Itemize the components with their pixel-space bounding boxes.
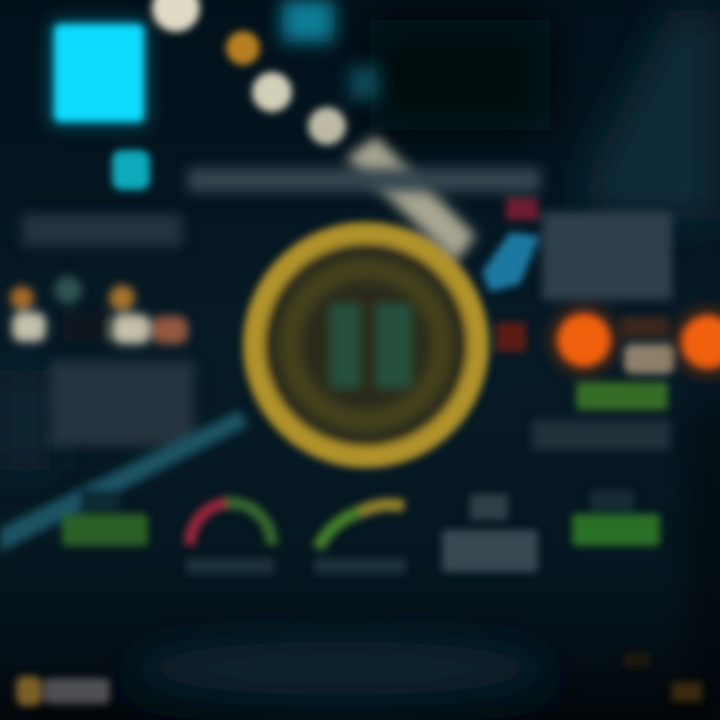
icon: green bar one — [62, 490, 148, 546]
mark: bottom right — [624, 652, 702, 702]
panel: left text block — [22, 214, 182, 246]
bar: right green — [576, 382, 668, 410]
gauge: red green — [190, 503, 272, 545]
logo: bottom left — [16, 676, 110, 706]
heading bar — [188, 168, 540, 192]
text: gauge two caption — [314, 558, 406, 574]
central gold ring — [254, 233, 478, 457]
icon: small cyan square — [112, 150, 150, 190]
panel: right text block — [542, 212, 672, 300]
panel: left lower text block — [50, 362, 194, 446]
icon: teal top blocks — [282, 0, 378, 100]
icon: center green bars — [330, 304, 412, 388]
diagonal teal beam — [0, 410, 248, 552]
text: gauge one caption — [186, 558, 274, 574]
icon: red and blue connector — [482, 198, 540, 292]
timeline: cream dots — [152, 0, 476, 262]
panel: bright cyan block — [50, 20, 148, 126]
icons: left cluster — [10, 276, 188, 344]
text: right caption — [532, 420, 670, 450]
icons: orange glowing circles — [496, 310, 720, 374]
panel: grey stat block — [442, 494, 538, 572]
gauge: green gold — [318, 505, 404, 548]
icon: green bar two — [572, 490, 660, 546]
